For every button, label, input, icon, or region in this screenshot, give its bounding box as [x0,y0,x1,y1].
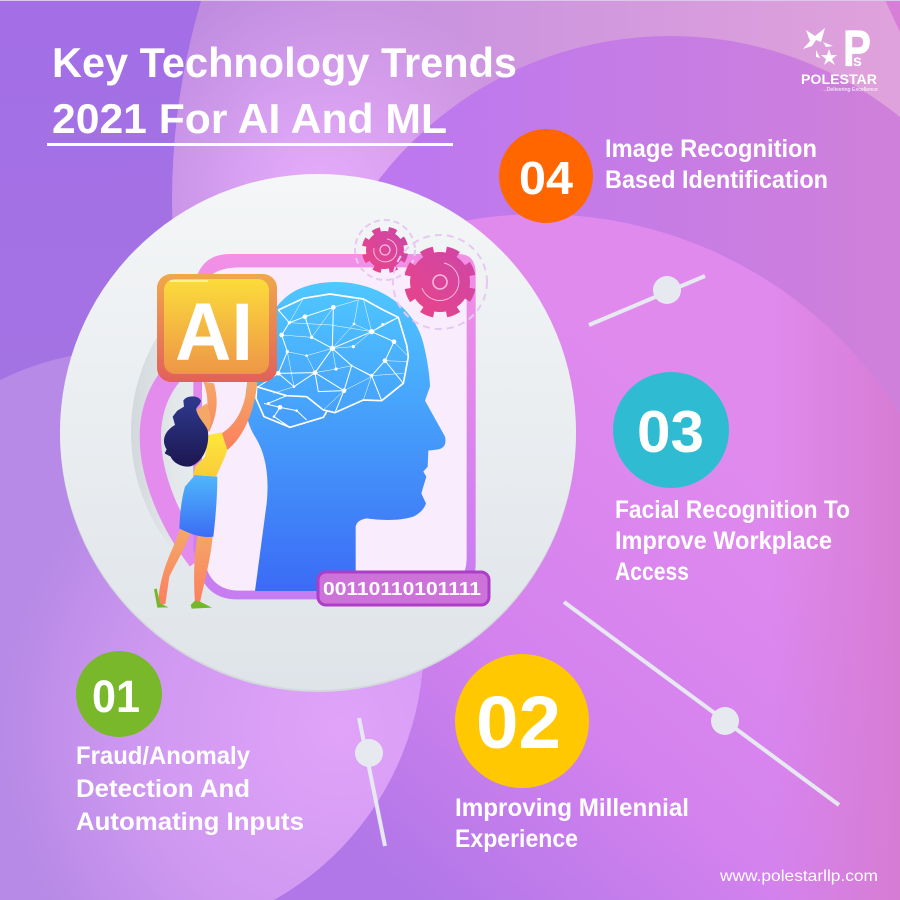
woman holding AI sign [154,382,257,609]
item 02 [455,654,689,853]
AI badge: AI [175,287,253,378]
website url: www.polestarllp.com [719,868,878,885]
gears [355,220,487,329]
skirt [179,475,217,537]
frame panel [193,254,476,599]
illustration: AI head [150,254,476,599]
label 04: Image Recognition [605,135,817,163]
label 03: Access [615,558,689,586]
head silhouette [245,282,445,591]
logo: Polestar: P [843,20,871,77]
label 02: Improving Millennial [455,794,689,822]
binary code tag [318,572,489,605]
large gear [393,235,487,329]
title [47,39,517,146]
side arc band [150,357,198,560]
small gear [355,220,415,280]
shoes [154,588,212,609]
central circular plate [60,174,576,692]
hair [164,396,208,467]
label 02: Experience [455,825,578,853]
logo: Polestar: s [853,53,862,70]
badge 02 [455,654,589,788]
AI badge [157,274,277,382]
label 03: Improve Workplace [615,527,832,555]
label 01: Fraud/Anomaly [76,742,250,770]
label 04: Based Identification [605,166,828,194]
badge 04: 04 [519,152,573,204]
badge 04 [499,129,593,223]
item 01 [76,651,304,836]
item 03 [613,372,850,586]
slider decoration upper [589,276,705,325]
legs [158,529,213,605]
label 01: Automating Inputs [76,808,304,836]
slider decoration lower [355,718,385,846]
badge 01: 01 [92,671,140,722]
badge 03 [613,372,729,488]
badge 02: 02 [476,681,561,764]
binary code tag: 00110110101111 [323,578,481,599]
top [193,432,227,477]
badge 01 [76,651,162,737]
slider decoration right [564,602,839,805]
brain network [256,294,408,427]
logo: Polestar: POLESTAR [801,71,877,87]
logo: Polestar: ...Delivering Excellence [822,87,878,93]
item 04 [499,129,828,223]
title: 2021 For AI And ML [52,95,447,142]
arms [203,382,257,450]
label 01: Detection And [76,775,250,803]
title: Key Technology Trends [52,39,517,86]
label 03: Facial Recognition To [615,496,850,524]
face [197,403,210,432]
badge 03: 03 [637,399,704,465]
logo: Polestar [801,20,878,93]
